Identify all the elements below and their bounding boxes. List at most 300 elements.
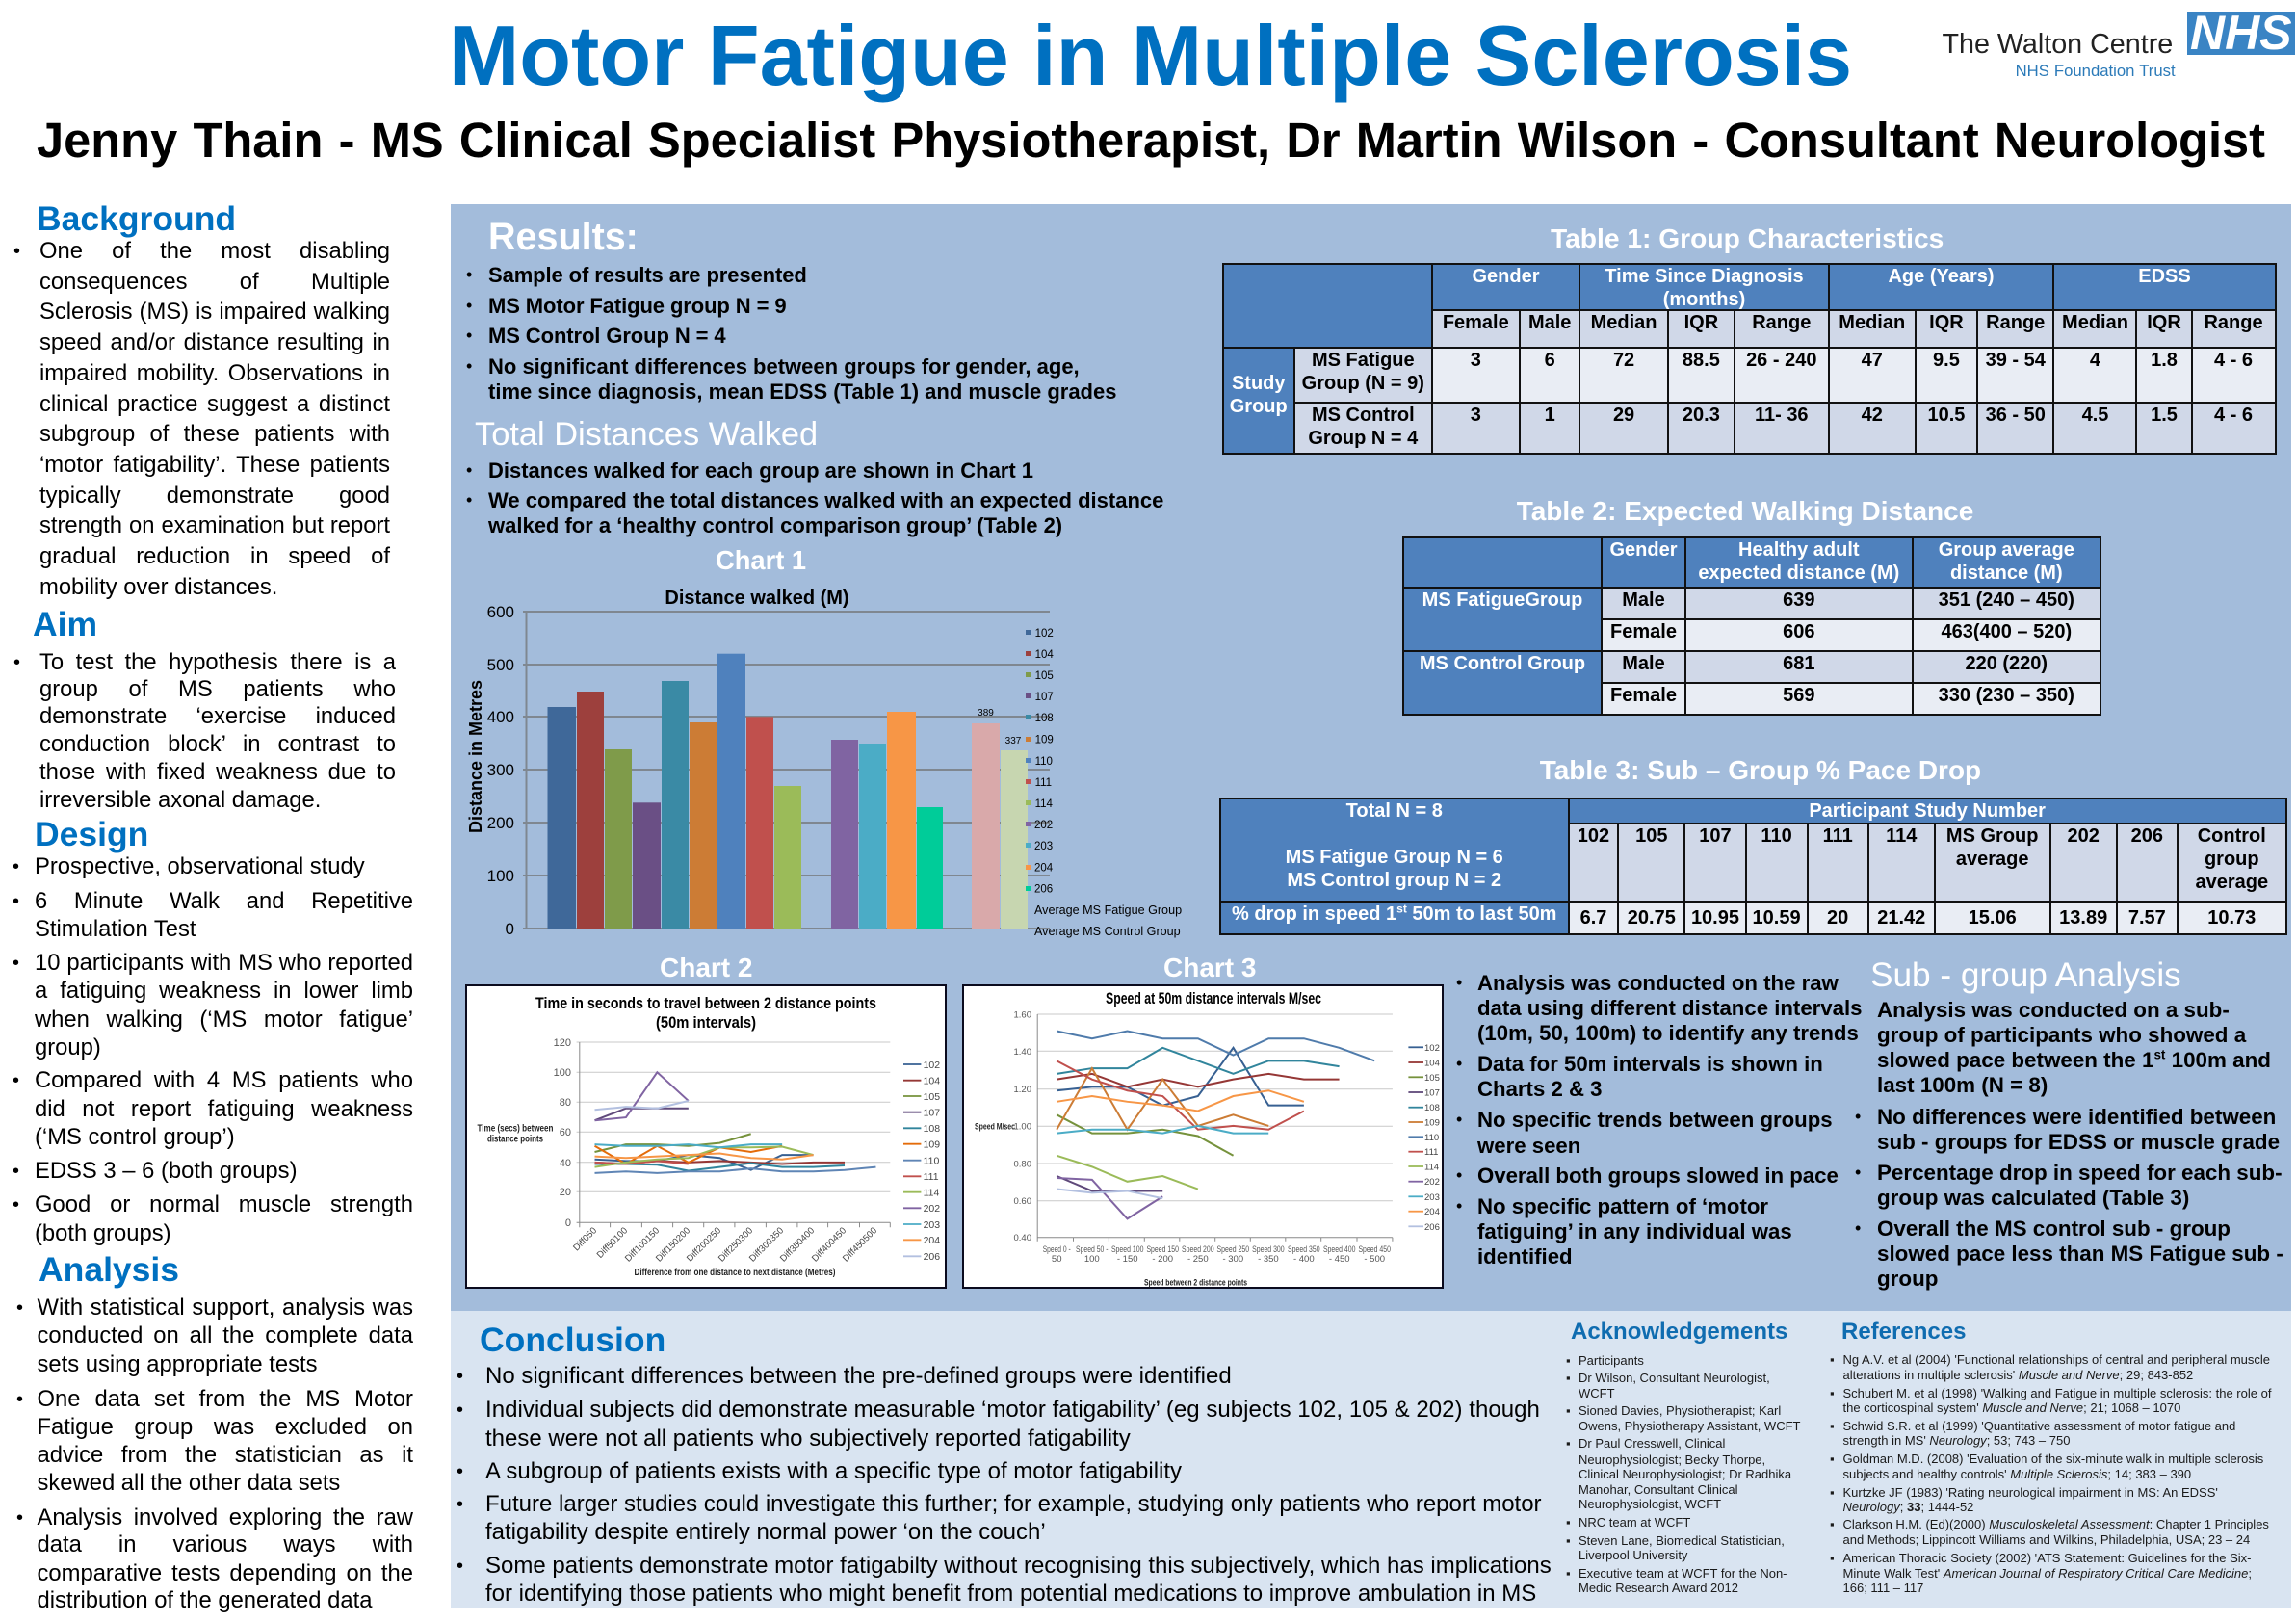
table 1: group characteristics: Median	[1591, 312, 1657, 333]
logo: The Walton Centre NHS Foundation Trust: NHS Foundation Trust	[2016, 62, 2176, 80]
text block: Sub-group Analysis	[1855, 956, 2283, 1291]
text block: Analysis: With statistical support, analysis was	[37, 1295, 413, 1321]
y axis labels	[1013, 1009, 1031, 1243]
text block: Background: Background	[37, 199, 236, 238]
text block: Analysis: •	[16, 1389, 23, 1410]
text block: Acknowledgements: Liverpool University	[1578, 1548, 1687, 1562]
text block: Sub-group Analysis: slowed pace less than MS Fatigue sub -	[1877, 1242, 2283, 1266]
text block: Analysis: conducted on all the complete data	[37, 1322, 413, 1348]
x axis labels: Speed 200	[1182, 1244, 1214, 1255]
legend: 110	[924, 1156, 939, 1167]
text block: References: subjects and healthy controls' Multiple Sclerosis; 14; 383 – 390	[1843, 1467, 2191, 1481]
text block: Analysis: sets using appropriate tests	[37, 1351, 318, 1377]
table 2: expected walking distance: Female	[1610, 685, 1677, 706]
heading and bullets: Results: MS Control Group N = 4	[488, 324, 726, 348]
text block: Sub-group Analysis: group was calculated (Table 3)	[1877, 1186, 2189, 1210]
table 1: group characteristics: 26 - 240	[1746, 350, 1816, 371]
table 3: sub-group percentage pace drop: Total N = 8	[1346, 800, 1443, 822]
x axis labels: Diff250300	[717, 1225, 755, 1264]
legend: 203	[1034, 841, 1053, 852]
table 1: group characteristics: 1	[1545, 405, 1555, 426]
legend: 107	[1424, 1088, 1440, 1098]
legend: 108	[1424, 1103, 1440, 1113]
text block: Background: •	[13, 241, 20, 262]
text block: Acknowledgements: Dr Wilson, Consultant Neurologist,	[1578, 1371, 1770, 1385]
y axis labels: 0.40	[1013, 1233, 1031, 1243]
table 3: sub-group percentage pace drop: 10.59	[1753, 907, 1801, 929]
table 3: sub-group percentage pace drop: Participant Study Number	[1809, 800, 2046, 822]
text block: analysis notes: No specific pattern of ‘motor	[1477, 1194, 1768, 1218]
y axis labels: 1.00	[1013, 1121, 1031, 1133]
text block: analysis notes: identified	[1477, 1244, 1573, 1269]
text block: analysis notes: No specific trends between groups	[1477, 1108, 1833, 1132]
table 1: group characteristics: 36 - 50	[1986, 405, 2046, 426]
legend: 203	[1424, 1192, 1440, 1203]
y axis labels: 1.40	[1013, 1047, 1031, 1058]
data labels	[978, 708, 1022, 746]
table 1: group characteristics: 1.5	[2151, 405, 2178, 426]
axis labels: 200	[487, 814, 514, 832]
text block: Acknowledgements	[1566, 1319, 1801, 1595]
text block: Conclusion: for identifying those patients who might benefit from potential medications to improve ambulation in MS	[485, 1581, 1536, 1607]
text block: Acknowledgements: Neurophysiologist, WCFT	[1578, 1497, 1721, 1511]
text block: Sub-group Analysis: Analysis was conducted on a sub-	[1877, 998, 2230, 1022]
legend: 109	[924, 1138, 940, 1150]
table 1: group characteristics: Male	[1528, 312, 1571, 333]
text block: Design: 6 Minute Walk and Repetitive	[35, 888, 413, 914]
x axis labels: - 150	[1117, 1254, 1138, 1265]
text block: References: Kurtzke JF (1983) 'Rating neurological impairment in MS: An EDSS'	[1843, 1485, 2218, 1500]
text block: Design	[13, 815, 413, 1246]
text block: Conclusion: •	[457, 1400, 463, 1421]
text block: Acknowledgements: ▪	[1566, 1566, 1571, 1581]
text block: Design: •	[13, 1070, 19, 1091]
y axis labels: 80	[560, 1097, 571, 1109]
table 2: expected walking distance: 330 (230 – 350)	[1939, 685, 2074, 706]
text block: Analysis	[16, 1250, 413, 1613]
x axis labels: Diff350400	[778, 1225, 817, 1264]
table 3: sub-group percentage pace drop: 114	[1886, 825, 1917, 847]
y axis title: Distance in Metres	[466, 680, 485, 833]
table 1: group characteristics: 42	[1862, 405, 1883, 426]
y axis labels: 20	[560, 1187, 571, 1198]
x axis labels: Diff100150	[623, 1225, 662, 1264]
text block: Conclusion: Future larger studies could investigate this further; for example, studying only patients who report motor	[485, 1491, 1542, 1517]
text block: Background: mobility over distances.	[39, 574, 277, 600]
legend: Average MS Fatigue Group	[1034, 903, 1182, 917]
text block: Aim: demonstrate ‘exercise induced	[39, 703, 396, 729]
text block: Aim: irreversible axonal damage.	[39, 787, 321, 813]
table 1: group characteristics: 10.5	[1927, 405, 1965, 426]
table 3: sub-group percentage pace drop: MS Fatigue Group N = 6	[1286, 847, 1503, 868]
text block: Background: speed and/or distance resulting in	[39, 329, 390, 355]
table 1: group characteristics: 4 - 6	[2214, 405, 2253, 426]
text block: Conclusion	[457, 1321, 1552, 1607]
x axis labels: Diff400450	[810, 1225, 848, 1264]
text block: Sub-group Analysis: •	[1855, 1163, 1861, 1182]
legend: 108	[1035, 713, 1054, 724]
text block: Conclusion: •	[457, 1366, 463, 1387]
table 2: expected walking distance: Female	[1610, 621, 1677, 642]
heading and bullets: Results: Results:	[488, 216, 639, 258]
text block: Design: a fatiguing weakness in lower limb	[35, 978, 413, 1004]
table 2: expected walking distance: Healthy adult	[1738, 539, 1860, 561]
legend: 206	[924, 1251, 940, 1263]
text block: Acknowledgements: ▪	[1566, 1403, 1571, 1418]
text block: References: Ng A.V. et al (2004) 'Functional relationships of central and peripheral muscle	[1843, 1352, 2270, 1367]
legend: 206	[1034, 884, 1053, 896]
table 2: expected walking distance: 639	[1783, 589, 1814, 611]
legend: 102	[924, 1060, 940, 1071]
legend: 109	[1035, 734, 1054, 746]
text block: Design: Good or normal muscle strength	[35, 1191, 413, 1217]
chart title	[535, 994, 876, 1032]
text block: Design: group)	[35, 1034, 101, 1060]
table 3: sub-group percentage pace drop: 202	[2067, 825, 2100, 847]
heading and bullets: Total Distances Walked: •	[466, 460, 472, 480]
text block: Acknowledgements: NRC team at WCFT	[1578, 1515, 1690, 1530]
table 1: group characteristics: 88.5	[1683, 350, 1720, 371]
text block: analysis notes: Data for 50m intervals is shown in	[1477, 1052, 1823, 1076]
text block: Aim: To test the hypothesis there is a	[39, 649, 396, 675]
text block: analysis notes: •	[1456, 1054, 1462, 1073]
table 1: group characteristics: 3	[1471, 405, 1481, 426]
table 3: sub-group percentage pace drop: 107	[1699, 825, 1732, 847]
table 1: group characteristics: Median	[1839, 312, 1905, 333]
table 2: expected walking distance: 463(400 – 520)	[1941, 621, 2072, 642]
legend: 107	[924, 1108, 940, 1119]
text block: References: Clarkson H.M. (Ed)(2000) Musculoskeletal Assessment: Chapter 1 Principles	[1843, 1517, 2269, 1531]
table 1: group characteristics: 4 - 6	[2214, 350, 2253, 371]
x axis labels: Diff200250	[685, 1225, 723, 1264]
table 1: group characteristics: 29	[1613, 405, 1634, 426]
text block: Sub-group Analysis: •	[1855, 1107, 1861, 1126]
legend: 204	[1034, 863, 1054, 875]
heading: Table 2: Table 2: Expected Walking Distance	[1517, 496, 1973, 526]
legend: 203	[924, 1219, 940, 1231]
x axis labels: - 350	[1258, 1254, 1279, 1265]
table 1: group characteristics: 4.5	[2082, 405, 2108, 426]
heading: Table 3: Table 3: Sub – Group % Pace Drop	[1540, 755, 1981, 785]
legend: 110	[1424, 1133, 1439, 1143]
text block: Acknowledgements: ▪	[1566, 1371, 1571, 1385]
table 1: group characteristics: 4	[2090, 350, 2100, 371]
heading and bullets: Results: •	[466, 326, 472, 345]
axis titles: Speed M/sec	[975, 1121, 1015, 1133]
table 3: sub-group percentage pace drop: MS Group average	[1946, 825, 2038, 870]
text block: Design: •	[13, 856, 19, 877]
table 1: group characteristics: Time Since Diagnosis	[1605, 266, 1804, 287]
table 1: group characteristics: 11- 36	[1755, 405, 1809, 426]
text block: Background: subgroup of these patients with	[39, 421, 390, 447]
text block: Design: •	[13, 1194, 19, 1216]
legend: 202	[1034, 820, 1053, 831]
text block: analysis notes: •	[1456, 1196, 1462, 1216]
table 1: group characteristics: EDSS	[2138, 266, 2191, 287]
text block: References: ▪	[1830, 1386, 1835, 1400]
table 1: group characteristics: Female	[1443, 312, 1509, 333]
legend	[1026, 628, 1182, 938]
text block: Background: clinical practice suggest a distinct	[39, 391, 390, 417]
chart title: Time in seconds to travel between 2 distance points	[535, 994, 876, 1012]
heading and bullets: Total Distances Walked: Distances walked for each group are shown in Chart 1	[488, 458, 1033, 483]
chart title: Speed at 50m distance intervals M/sec	[1106, 989, 1321, 1007]
table 2: expected walking distance: expected distance (M)	[1698, 562, 1899, 584]
axis titles: Difference from one distance to next distance (Metres)	[634, 1267, 836, 1278]
y axis labels: 100	[554, 1067, 571, 1079]
text block: Design: 10 participants with MS who reported	[35, 950, 413, 976]
text block: Acknowledgements: ▪	[1566, 1436, 1571, 1451]
heading and bullets: Results: •	[466, 356, 472, 376]
text block: References: ▪	[1830, 1352, 1835, 1367]
table 1: group characteristics: (months)	[1663, 289, 1745, 310]
text block: Acknowledgements: Medic Research Award 2012	[1578, 1581, 1738, 1595]
axis labels: 600	[487, 603, 514, 621]
text block: Conclusion: fatigability despite entirely normal power ‘on the couch’	[485, 1519, 1046, 1545]
text block: References: and Methods; Lippincott Williams and Wilkins, Philadelphia, USA; 23 – 24	[1843, 1532, 2250, 1547]
x axis labels: Speed 100	[1111, 1244, 1143, 1255]
text block: Aim: conduction block’ in contrast to	[39, 731, 396, 757]
table 1: group characteristics: 39 - 54	[1986, 350, 2046, 371]
legend: 202	[1424, 1177, 1440, 1188]
text block: Background: gradual reduction in speed of	[39, 543, 390, 569]
text block: Background: ‘motor fatigability’. These patients	[39, 452, 390, 478]
table 1: group characteristics: 9.5	[1933, 350, 1960, 371]
text block: Background: One of the most disabling	[39, 238, 390, 264]
legend	[903, 1060, 940, 1263]
y axis labels: 1.60	[1013, 1009, 1031, 1021]
text block: References: ▪	[1830, 1452, 1835, 1466]
legend: 104	[924, 1075, 940, 1086]
text block: Analysis: One data set from the MS Motor	[37, 1386, 413, 1412]
text block: Aim: those with fixed weakness due to	[39, 759, 396, 785]
legend: 114	[1035, 798, 1054, 810]
x axis labels: Speed 400	[1323, 1244, 1355, 1255]
text block: Conclusion: •	[457, 1556, 463, 1577]
heading and bullets: Total Distances Walked: Total Distances Walked	[475, 416, 818, 453]
legend: 102	[1424, 1043, 1440, 1054]
text block: Design: •	[13, 1161, 19, 1182]
table 3: sub-group percentage pace drop: 10.73	[2207, 907, 2256, 929]
axis titles: distance points	[487, 1133, 543, 1144]
text block: Conclusion: these were not all patients who subjectively reported fatigability	[485, 1426, 1131, 1452]
text block: References: Schwid S.R. et al (1999) 'Quantitative assessment of motor fatigue and	[1843, 1419, 2235, 1433]
legend: 105	[924, 1091, 940, 1103]
y axis labels	[554, 1037, 571, 1229]
legend: 111	[924, 1171, 939, 1183]
legend: 105	[1424, 1073, 1440, 1084]
x axis labels: Speed 150	[1146, 1244, 1179, 1255]
text block: Design: Prospective, observational study	[35, 853, 365, 879]
text block: Background: Sclerosis (MS) is impaired walking	[39, 299, 390, 325]
text block: analysis notes: Charts 2 & 3	[1477, 1077, 1602, 1101]
x axis labels	[571, 1225, 879, 1264]
text block: analysis notes: •	[1456, 1165, 1462, 1185]
text block: Design: when walking (‘MS motor fatigue’	[35, 1007, 413, 1033]
table 1: group characteristics: Range	[2204, 312, 2263, 333]
heading: Chart 1: Chart 1	[716, 545, 806, 575]
x axis labels: Speed 50 -	[1076, 1244, 1109, 1255]
text block: References: 166; 111 – 117	[1843, 1581, 1923, 1595]
table 3: sub-group percentage pace drop: 6.7	[1580, 907, 1606, 929]
table 2: expected walking distance: Male	[1622, 653, 1665, 674]
text block: References: ▪	[1830, 1419, 1835, 1433]
table 2: expected walking distance: Male	[1622, 589, 1665, 611]
x axis labels: Speed 250	[1217, 1244, 1249, 1255]
table 2: expected walking distance: 606	[1783, 621, 1814, 642]
table 1: group characteristics: 3	[1471, 350, 1481, 371]
table 2: expected walking distance: 351 (240 – 450)	[1939, 589, 2074, 611]
legend	[1408, 1043, 1440, 1233]
table 3: sub-group percentage pace drop: Control group average	[2195, 825, 2268, 893]
table 1: group characteristics: MS Control Group N = 4	[1308, 405, 1418, 449]
text block: Background: impaired mobility. Observations in	[39, 360, 390, 386]
bar chart: distance walked	[466, 588, 1182, 938]
table 1: group characteristics: Study Group	[1230, 373, 1288, 417]
text block: Background: consequences of Multiple	[39, 269, 390, 295]
text block: Acknowledgements: Acknowledgements	[1571, 1319, 1787, 1345]
text block: Acknowledgements: Steven Lane, Biomedical Statistician,	[1578, 1533, 1785, 1548]
text block: Acknowledgements: Manohar, Consultant Clinical	[1578, 1482, 1737, 1497]
text block: Aim: group of MS patients who	[39, 676, 396, 702]
data labels: 337	[1005, 736, 1022, 746]
text block: Background: strength on examination but report	[39, 512, 390, 538]
table 3: sub-group percentage pace drop: 20	[1827, 907, 1848, 929]
text block: References: Goldman M.D. (2008) 'Evaluation of the six-minute walk in multiple sclerosis	[1843, 1452, 2263, 1466]
text block: Conclusion: Conclusion	[480, 1321, 665, 1359]
text block: Analysis: comparative tests depending on the	[37, 1560, 413, 1586]
axis labels: 100	[487, 867, 514, 885]
table 2: expected walking distance: Gender	[1609, 539, 1678, 561]
x axis labels: - 450	[1329, 1254, 1350, 1265]
y axis labels: 0.60	[1013, 1196, 1031, 1207]
text block: Sub-group Analysis: group	[1877, 1267, 1938, 1291]
x axis labels: 50	[1052, 1254, 1061, 1265]
text block: Acknowledgements: Dr Paul Cresswell, Clinical	[1578, 1436, 1725, 1451]
heading: Table 1: Table 1: Group Characteristics	[1551, 222, 1944, 253]
table 3: sub-group percentage pace drop: 110	[1761, 825, 1792, 847]
text block: Sub-group Analysis: Overall the MS control sub - group	[1877, 1216, 2231, 1241]
text block: Analysis: •	[16, 1507, 23, 1529]
logo: The Walton Centre NHS Foundation Trust	[1942, 12, 2295, 80]
text block: Analysis: Fatigue group was excluded on	[37, 1414, 413, 1440]
logo: The Walton Centre NHS Foundation Trust: The Walton Centre	[1942, 29, 2173, 60]
legend: 105	[1035, 670, 1054, 682]
table 3: sub-group percentage pace drop: MS Control group N = 2	[1287, 870, 1501, 891]
text block: Sub-group Analysis: Percentage drop in speed for each sub-	[1877, 1161, 2283, 1185]
table 1: group characteristics: 1.8	[2151, 350, 2178, 371]
text block: References: References	[1841, 1319, 1966, 1345]
table 1: group characteristics: 47	[1862, 350, 1883, 371]
text block: Design: (‘MS control group’)	[35, 1124, 235, 1150]
legend: 111	[1424, 1147, 1438, 1158]
text block: analysis notes	[1456, 971, 1862, 1269]
table 2: expected walking distance	[1402, 536, 2101, 716]
table 1: group characteristics: Age (Years)	[1888, 266, 1995, 287]
legend: 108	[924, 1123, 940, 1135]
text block: References: Neurology; 33; 1444-52	[1843, 1500, 1973, 1514]
series lines	[1057, 1031, 1374, 1218]
table 3: sub-group percentage pace drop: 10.95	[1691, 907, 1739, 929]
legend: 109	[1424, 1117, 1440, 1129]
x axis labels: Diff50100	[595, 1225, 630, 1261]
text block: Conclusion: •	[457, 1494, 463, 1515]
table 3: sub-group percentage pace drop: 206	[2131, 825, 2163, 847]
x axis labels: - 250	[1187, 1254, 1209, 1265]
legend: 111	[1035, 777, 1052, 789]
text block: Design: EDSS 3 – 6 (both groups)	[35, 1158, 297, 1184]
heading and bullets: Results: time since diagnosis, mean EDSS (Table 1) and muscle grades	[488, 379, 1116, 404]
text block: analysis notes: (10m, 50, 100m) to identify any trends	[1477, 1021, 1859, 1045]
text block: Acknowledgements: ▪	[1566, 1533, 1571, 1548]
text block: Analysis: •	[16, 1297, 23, 1319]
table 1: group characteristics: 20.3	[1683, 405, 1720, 426]
heading: Chart 2: Chart 2	[660, 953, 752, 982]
series lines	[595, 1072, 875, 1173]
text block: Acknowledgements: Sioned Davies, Physiotherapist; Karl	[1578, 1403, 1781, 1418]
legend: 104	[1424, 1058, 1440, 1069]
text block: analysis notes: Overall both groups slowed in pace	[1477, 1164, 1839, 1188]
table 2: expected walking distance: 569	[1783, 685, 1814, 706]
table 1: group characteristics: MS Fatigue Group (N = 9)	[1302, 350, 1424, 394]
text block: Conclusion: A subgroup of patients exists with a specific type of motor fatigability	[485, 1458, 1182, 1484]
legend: 110	[1035, 756, 1053, 768]
chart title: Distance walked (M)	[665, 588, 849, 609]
table 1: group characteristics: Median	[2062, 312, 2128, 333]
table 3: sub-group percentage pace drop: 102	[1578, 825, 1609, 847]
y axis labels: 120	[554, 1037, 571, 1049]
text block: Aim: •	[13, 652, 20, 673]
text block: Design: Compared with 4 MS patients who	[35, 1067, 413, 1093]
axis labels	[487, 603, 514, 938]
text block: Conclusion: Some patients demonstrate motor fatigabilty without recognising this subjectively, which has implications	[485, 1553, 1552, 1579]
legend: 107	[1035, 692, 1054, 703]
table 1: group characteristics: IQR	[1684, 312, 1718, 333]
text block: Design: Design	[35, 815, 148, 853]
text block: Background	[13, 199, 391, 600]
x axis labels: - 500	[1364, 1254, 1385, 1265]
text block: analysis notes: were seen	[1477, 1134, 1580, 1158]
heading and bullets: Total Distances Walked: •	[466, 490, 472, 510]
text block: Design: did not report fatiguing weakness	[35, 1096, 413, 1122]
text block: Design: (both groups)	[35, 1220, 171, 1246]
axis labels: 500	[487, 656, 514, 674]
text block: Acknowledgements: ▪	[1566, 1353, 1571, 1368]
legend: 202	[924, 1203, 940, 1215]
text block: References: ▪	[1830, 1517, 1835, 1531]
table 1: group characteristics	[1222, 263, 2277, 455]
table 3: sub-group percentage pace drop: 20.75	[1628, 907, 1676, 929]
legend: 206	[1424, 1222, 1440, 1233]
heading and bullets: Results: No significant differences between groups for gender, age,	[488, 354, 1080, 379]
legend: 204	[924, 1235, 940, 1246]
table 1: group characteristics: Gender	[1472, 266, 1539, 287]
table 3: sub-group percentage pace drop: % drop in speed 1st 50m to last 50m	[1232, 902, 1556, 925]
text block: Acknowledgements: ▪	[1566, 1515, 1571, 1530]
text block: analysis notes: •	[1456, 1110, 1462, 1129]
text block: References: alterations in multiple sclerosis' Muscle and Nerve; 29; 843-852	[1843, 1368, 2193, 1382]
text block: References: the corticospinal system' Muscle and Nerve; 21; 1068 – 1070	[1843, 1400, 2180, 1415]
text block: Analysis: advice from the statistician as it	[37, 1442, 413, 1468]
text block: Aim	[13, 605, 396, 813]
legend: 102	[1035, 628, 1054, 640]
table 3: sub-group percentage pace drop: 7.57	[2128, 907, 2166, 929]
text block: Analysis: Analysis involved exploring the raw	[37, 1504, 413, 1530]
x axis labels: Diff450500	[841, 1225, 879, 1264]
text block: Design: •	[13, 891, 19, 912]
legend: 114	[1424, 1162, 1439, 1173]
y axis labels: 40	[560, 1158, 571, 1169]
